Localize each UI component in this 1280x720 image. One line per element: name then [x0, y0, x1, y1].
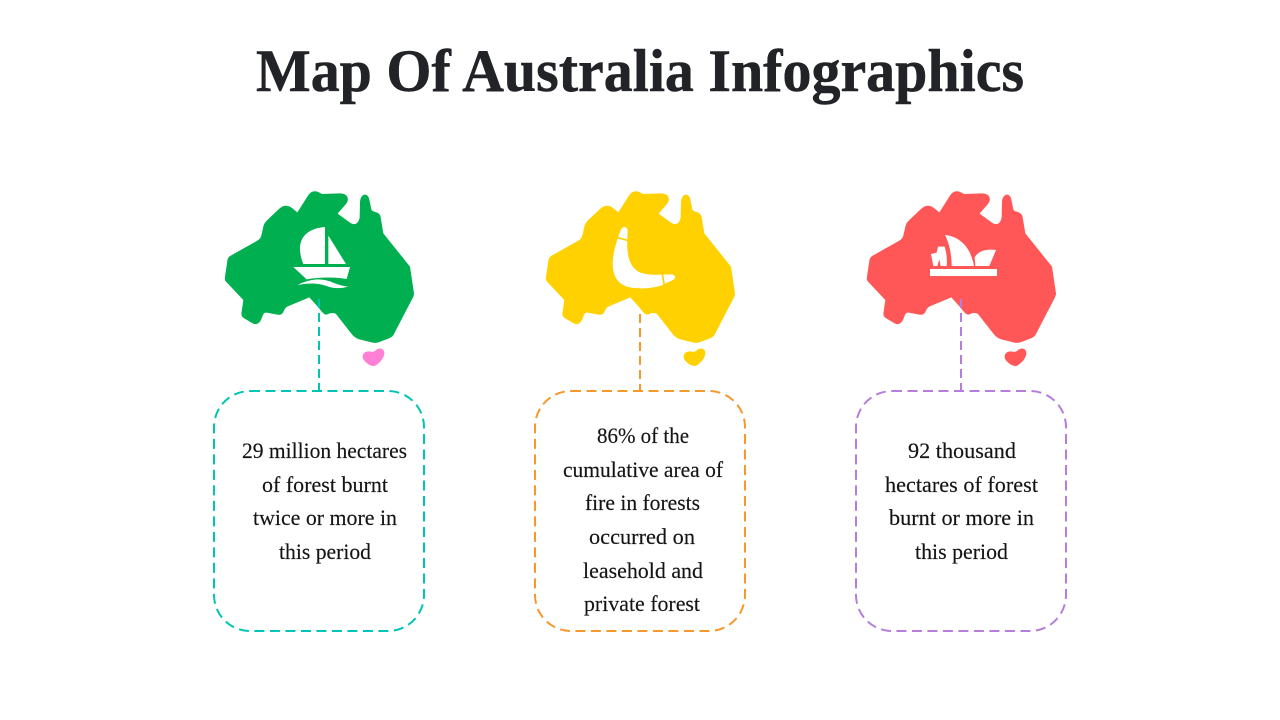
text: 92 thousand hectares [885, 438, 1038, 564]
text: leasehold and private forest: fire in forests [585, 490, 700, 515]
connector line: yellow map to box [639, 314, 641, 391]
text: 92 thousand hectares: hectares of forest [885, 472, 1038, 497]
panel: forest burnt twice [214, 191, 424, 631]
text: leasehold and private forest: private forest [584, 591, 700, 616]
text: leasehold and private forest [563, 423, 724, 616]
title: Map Of Australia Infographics [256, 38, 1024, 104]
text: forest burnt twice: this period [279, 539, 371, 564]
icon: sailing boat [293, 227, 350, 288]
island: pink Tasmania [363, 349, 384, 366]
text: forest burnt twice: 29 million hectares [242, 438, 407, 463]
text: leasehold and private forest: occurred on [589, 524, 695, 549]
text: forest burnt twice: of forest burnt [262, 472, 388, 497]
panel: 92 thousand hectares [856, 191, 1066, 631]
map: yellow Australia [546, 191, 735, 366]
text box: green dashed [214, 391, 424, 631]
icon: Sydney Opera House [930, 235, 997, 276]
text box: purple dashed [856, 391, 1066, 631]
connector line: green map to box [318, 299, 320, 391]
text: 92 thousand hectares: this period [915, 539, 1008, 564]
text: 92 thousand hectares: 92 thousand [908, 438, 1016, 463]
text: leasehold and private forest: leasehold and [583, 558, 703, 583]
map: red Australia [867, 191, 1056, 366]
text: leasehold and private forest: cumulative area of [563, 457, 724, 482]
text: 92 thousand hectares: burnt or more in [889, 505, 1034, 530]
text: forest burnt twice [242, 438, 407, 564]
text: forest burnt twice: twice or more in [253, 505, 397, 530]
connector line: red map to box [960, 299, 962, 391]
text: leasehold and private forest: 86% of the [597, 423, 689, 448]
map: green Australia [225, 191, 414, 343]
text box: orange dashed [535, 391, 745, 631]
icon: boomerang [613, 227, 675, 288]
panel: leasehold and private forest [535, 191, 745, 631]
